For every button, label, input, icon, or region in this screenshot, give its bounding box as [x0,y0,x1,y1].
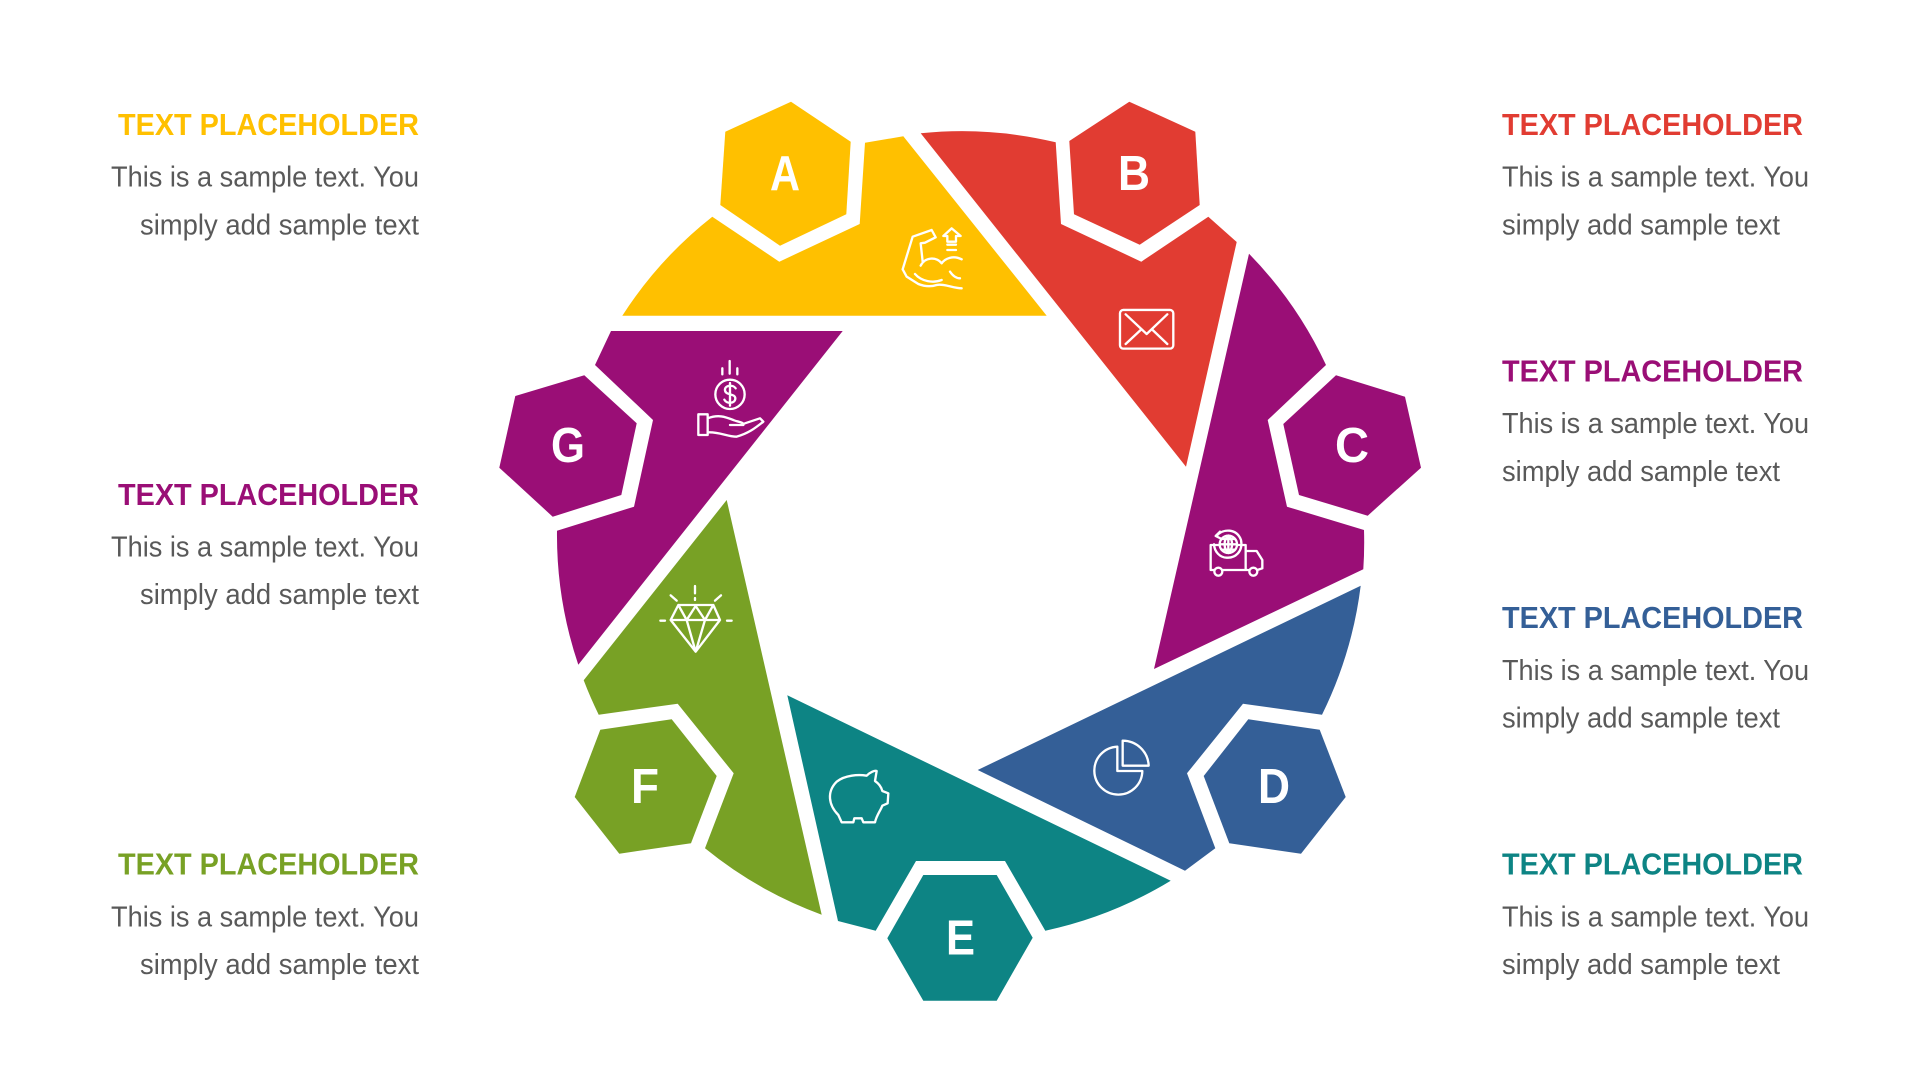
icon: envelope [1120,310,1173,349]
heading D: TEXT PLACEHOLDER [1502,600,1803,635]
segment G: purple [499,331,843,665]
body A: simply add sample text [140,209,419,241]
segment body G [557,331,843,665]
body G [111,532,419,611]
hexagon A [720,102,851,246]
icon: delivery truck with globe [1211,531,1262,576]
hexagon G [499,375,637,517]
segment body F [584,500,822,915]
icon: flexed muscle with arrow [903,228,962,288]
heading A: TEXT PLACEHOLDER [118,107,419,142]
body B: This is a sample text. You [1502,162,1809,194]
body C: simply add sample text [1502,456,1780,488]
icon: pie chart [1094,741,1149,795]
heading C: TEXT PLACEHOLDER [1502,354,1803,388]
segment body D [978,586,1361,871]
body F [111,901,419,981]
letter C: C [1335,419,1369,473]
text block: A, yellow [111,107,419,241]
hexagon E [887,875,1033,1001]
heading E: TEXT PLACEHOLDER [1502,847,1803,882]
segment A: yellow [622,102,1047,316]
segment body A [622,136,1047,316]
segment C: purple [1154,254,1421,669]
hexagon B [1069,102,1200,245]
body E: simply add sample text [1502,949,1780,981]
hexagon C [1283,375,1421,516]
text block: G, purple [111,477,419,611]
letter F: F [631,760,659,814]
letter A: A [770,147,800,201]
body G: This is a sample text. You [111,531,419,563]
hexagon D [1204,719,1346,854]
segment D: blue [978,586,1361,871]
heading G: TEXT PLACEHOLDER [118,477,419,512]
text block: D, blue [1502,600,1809,734]
letter E: E [946,911,975,965]
body C [1502,408,1809,488]
body F: This is a sample text. You [111,901,419,933]
icon: diamond [660,586,732,652]
text block: F, green [111,847,419,981]
letter B: B [1118,147,1150,201]
body D: simply add sample text [1502,702,1780,734]
body A [111,162,419,241]
segment F: green [575,500,822,915]
text block: B, red [1502,107,1809,241]
body B [1502,162,1809,241]
body E [1502,901,1809,981]
body G: simply add sample text [140,579,419,611]
body A: This is a sample text. You [111,162,419,194]
text block: C, purple [1502,354,1809,488]
segment body B [921,131,1237,467]
heading B: TEXT PLACEHOLDER [1502,107,1803,142]
segment E: teal [787,695,1171,1001]
body C: This is a sample text. You [1502,408,1809,440]
icon: hand holding coin [698,361,763,437]
segment B: red [921,102,1237,467]
body E: This is a sample text. You [1502,901,1809,933]
icon: piggy bank [830,771,888,822]
letter G: G [551,419,585,473]
hexagon F [575,719,717,854]
heading F: TEXT PLACEHOLDER [118,847,419,882]
body D [1502,655,1809,734]
text block: E, teal [1502,847,1809,981]
body D: This is a sample text. You [1502,655,1809,687]
body B: simply add sample text [1502,209,1780,241]
letter D: D [1258,760,1290,814]
segment body C [1154,254,1364,669]
body F: simply add sample text [140,949,419,981]
segment body E [787,695,1171,931]
